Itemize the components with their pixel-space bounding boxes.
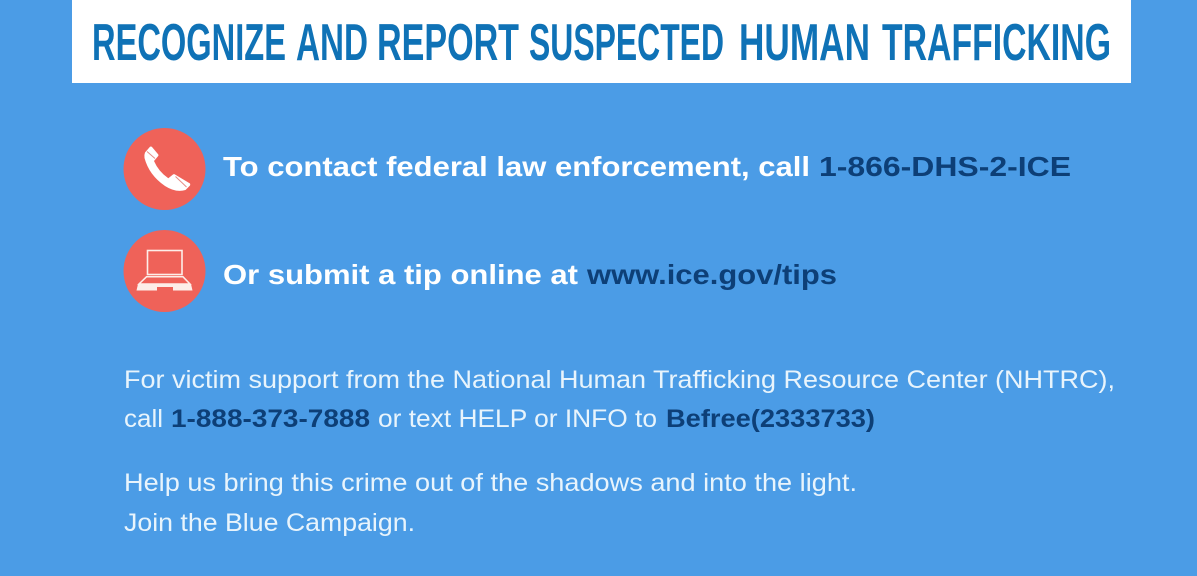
online tip line	[223, 259, 837, 290]
victim support text	[124, 366, 1115, 433]
icon: phone	[124, 128, 206, 210]
title: REPORT	[377, 14, 519, 72]
victim support text: Befree(2333733)	[666, 405, 875, 433]
icon: laptop	[124, 230, 206, 312]
online tip line: www.ice.gov/tips	[586, 259, 837, 290]
victim support text: For victim support from the National Human Trafficking Resource Center (NHTRC),	[124, 366, 1115, 394]
closing message: Join the Blue Campaign.	[124, 509, 415, 537]
title: AND	[296, 14, 368, 72]
title	[92, 14, 1111, 72]
contact line: To contact federal law enforcement, call	[223, 151, 810, 182]
title: RECOGNIZE	[92, 14, 286, 72]
online tip line: Or submit a tip online at	[223, 259, 578, 290]
title: HUMAN	[739, 14, 870, 72]
victim support text: 1-888-373-7888	[171, 405, 370, 433]
title: SUSPECTED	[529, 14, 724, 72]
closing message	[124, 469, 857, 537]
title banner	[72, 0, 1131, 83]
closing message: Help us bring this crime out of the shadows and into the light.	[124, 469, 857, 497]
contact line	[223, 151, 1071, 182]
contact line: 1-866-DHS-2-ICE	[819, 151, 1071, 182]
victim support text: call	[124, 405, 163, 433]
victim support text: or text HELP or INFO to	[378, 405, 657, 433]
